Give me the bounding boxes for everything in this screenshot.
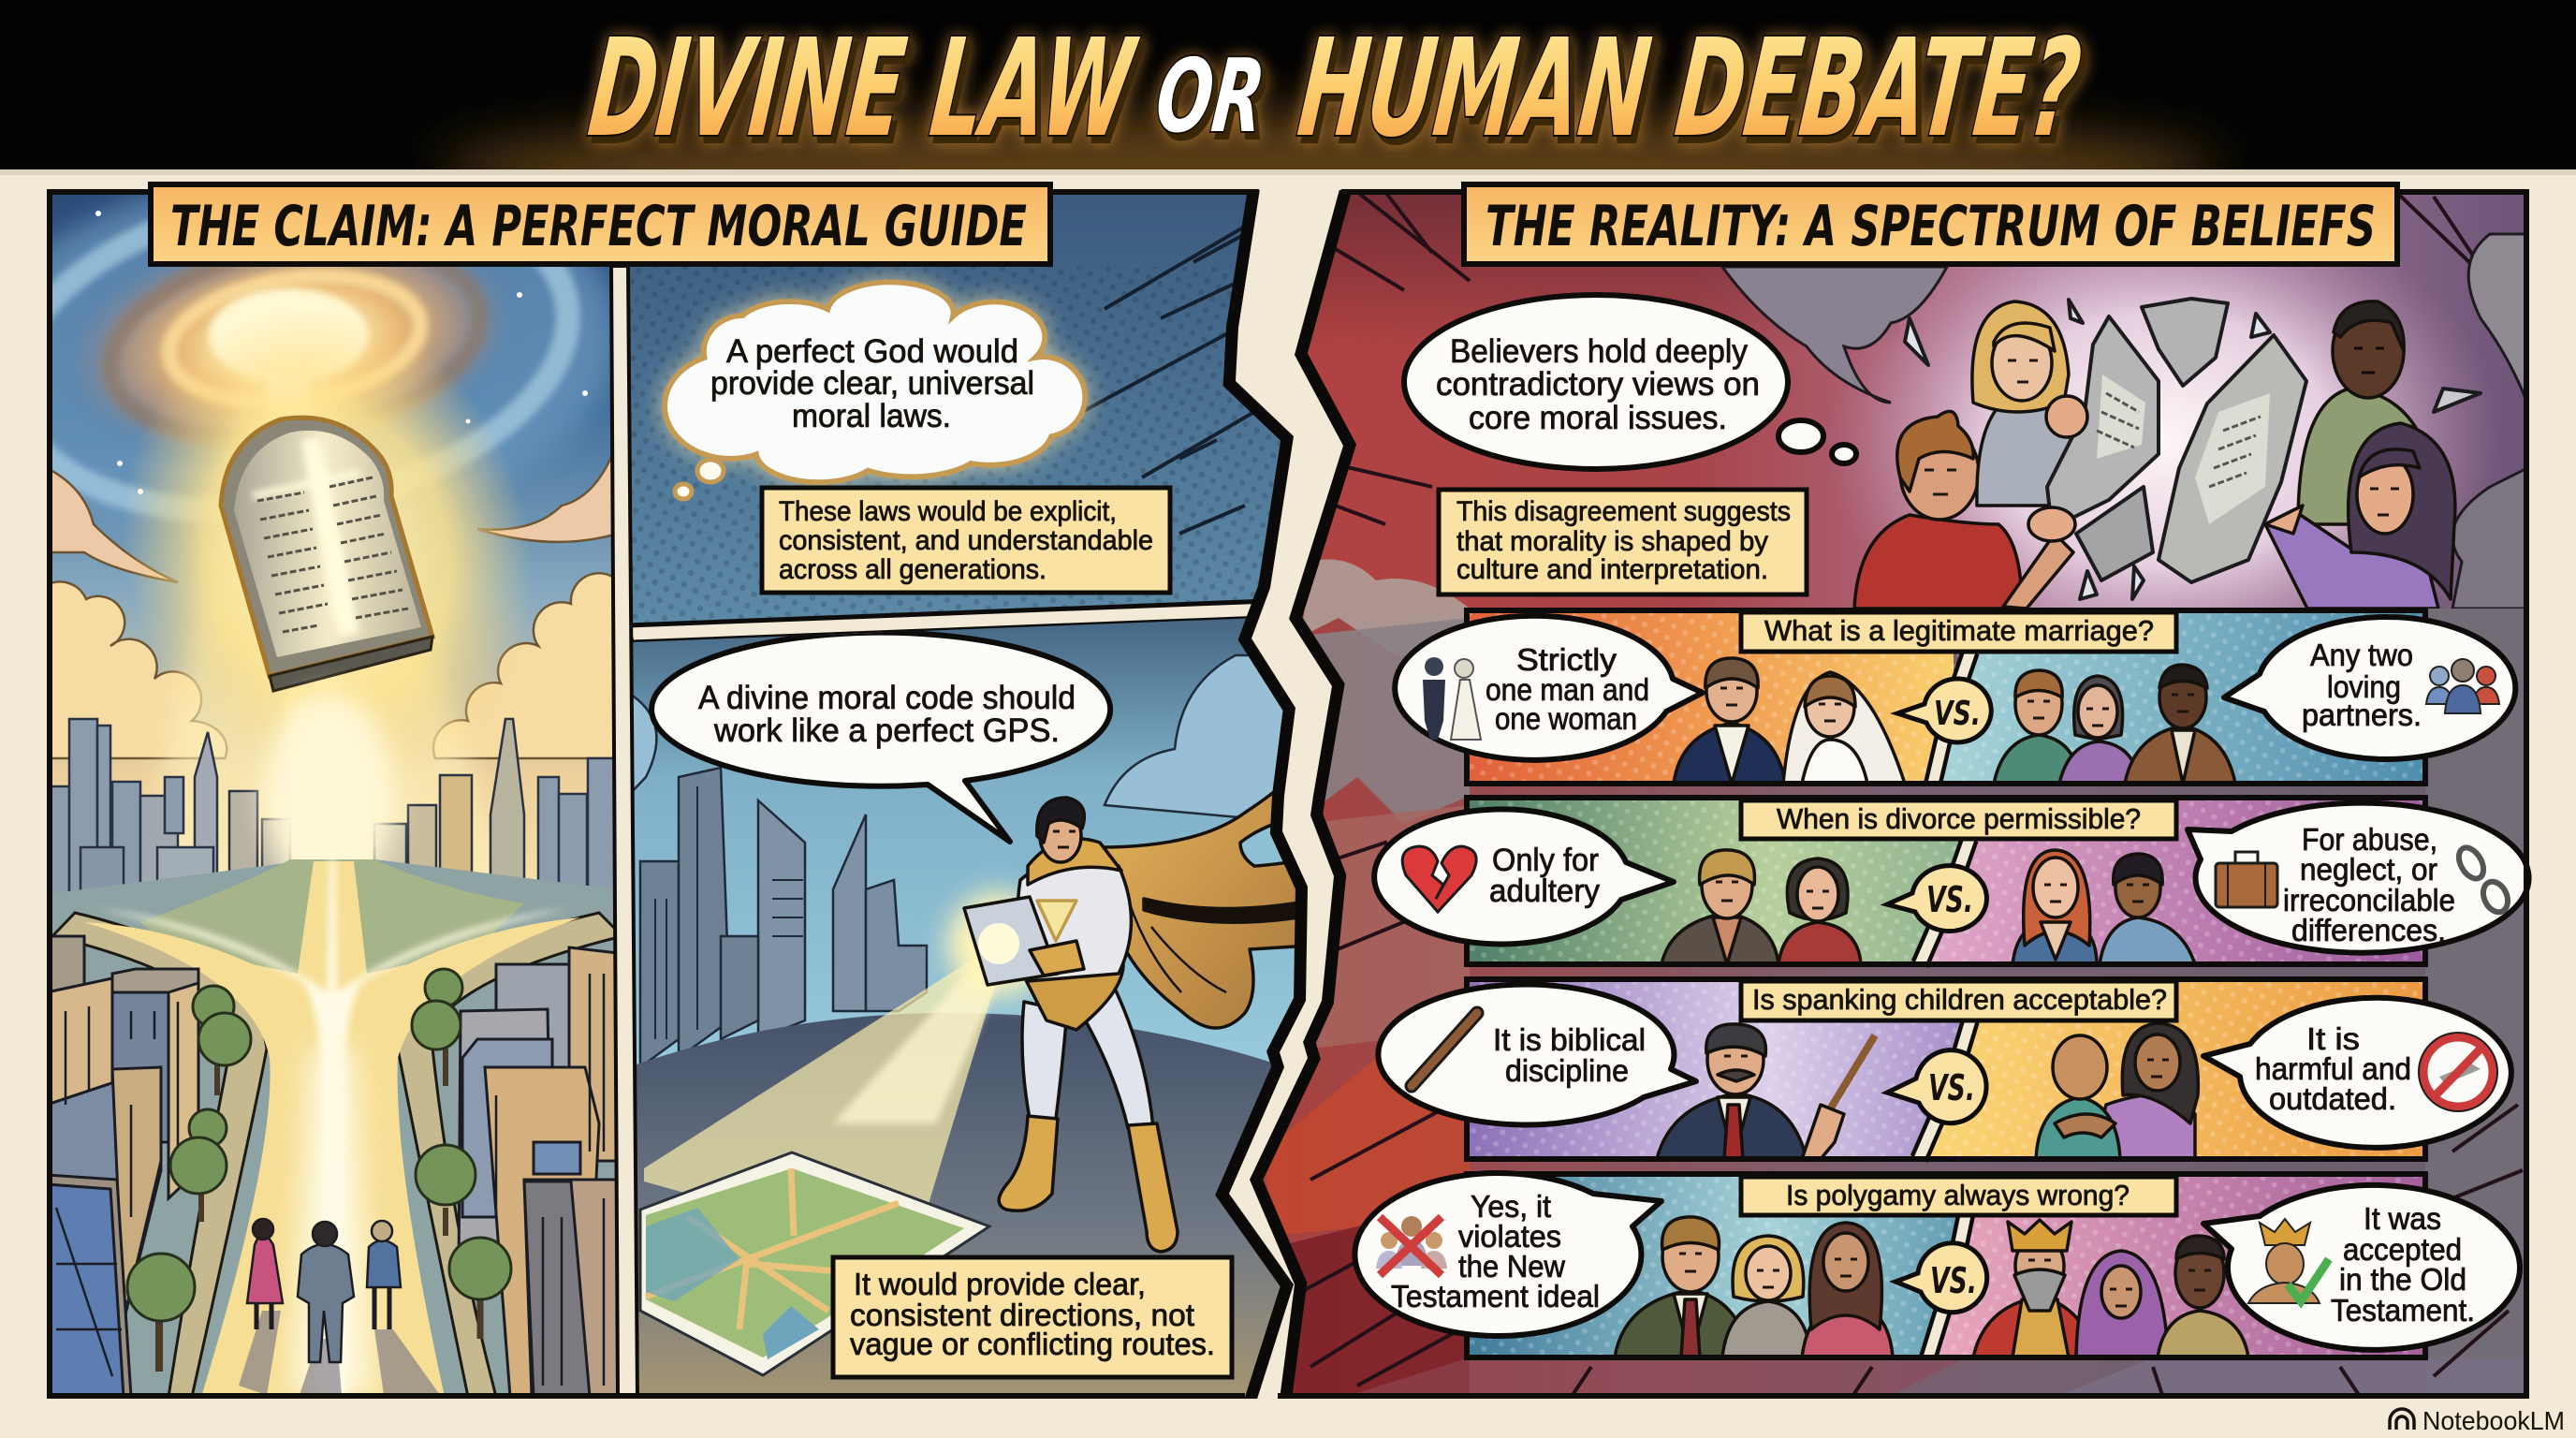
- bubble: one man one woman: [1395, 616, 1703, 760]
- bubble: one man one woman: Strictly: [1516, 642, 1617, 677]
- torso: [1025, 964, 1123, 1030]
- gutter between blue panels: [628, 601, 1269, 642]
- bubble: violates New Testament: Testament ideal: [1391, 1279, 1600, 1313]
- light beam: [644, 892, 1050, 1256]
- row 3: spanking: [1378, 979, 2511, 1159]
- blonde woman: [1972, 301, 2079, 506]
- three couple figures: [1994, 665, 2235, 784]
- caption box: clear directions: [833, 1257, 1232, 1377]
- tan robed man: [2158, 1236, 2248, 1357]
- caption box: explicit laws: consistent, and understandable: [779, 525, 1153, 556]
- bubble: one man one woman: one woman: [1495, 701, 1637, 736]
- bubble: abuse neglect: irreconcilable: [2283, 883, 2455, 917]
- title: DIVINE LAW: [582, 10, 1144, 168]
- thought text: moral laws.: [792, 398, 951, 434]
- man in blue shirt: [2100, 854, 2195, 964]
- bubble: biblical discipline: discipline: [1505, 1053, 1629, 1088]
- bubble: accepted in Old Testament: Testament.: [2331, 1293, 2475, 1328]
- question banner: Is spanking children acceptable?: [1752, 983, 2167, 1016]
- icon: prohibition sign: [2419, 1033, 2497, 1111]
- icon: suitcase: [2216, 852, 2277, 907]
- bubble: contradictory views: contradictory views on: [1436, 366, 1760, 403]
- bubble: harmful outdated: outdated.: [2269, 1081, 2396, 1116]
- bubble: contradictory views: [1404, 295, 1856, 469]
- woman in red: [1778, 858, 1861, 964]
- city skyline: [47, 719, 616, 908]
- bubble: only for adultery: [1374, 809, 1674, 944]
- caption box: clear directions: It would provide clear,: [854, 1267, 1146, 1301]
- hijab woman: [2076, 1251, 2168, 1357]
- bubble: one man one woman: one man and: [1486, 672, 1649, 707]
- caption box: disagreement: [1439, 490, 1807, 594]
- title: OR: [1151, 37, 1270, 155]
- blond man: [1615, 1217, 1749, 1357]
- blonde woman: [1722, 1236, 1811, 1357]
- bubble: biblical discipline: It is biblical: [1493, 1022, 1646, 1057]
- bubble: harmful outdated: harmful and: [2255, 1051, 2411, 1086]
- left buildings: [47, 936, 198, 1397]
- vs badge: [1897, 679, 1991, 742]
- grey rubble clouds: [1722, 234, 2527, 609]
- head: [1040, 810, 1081, 862]
- bubble: violates New Testament: Yes, it: [1471, 1189, 1551, 1224]
- landscape: [47, 859, 637, 1395]
- bride: [1783, 672, 1905, 784]
- illustration: people breaking stone tablets: [1722, 187, 2527, 693]
- broken stone tablets: [1905, 299, 2481, 599]
- caption box: clear directions: consistent directions, not: [850, 1298, 1194, 1332]
- map on ground: [640, 1152, 989, 1375]
- caption box: explicit laws: across all generations.: [779, 554, 1046, 585]
- thought text: [711, 338, 1033, 428]
- vs badge: [1895, 1243, 1987, 1313]
- vs badge: [1887, 1050, 1986, 1123]
- clouds: [47, 440, 618, 758]
- swirling sky: [52, 195, 610, 521]
- bubble: abuse neglect: neglect, or: [2300, 852, 2437, 887]
- superhero: [964, 772, 1310, 1252]
- caption box: disagreement: that morality is shaped by: [1456, 526, 1768, 557]
- bubble: only for adultery: adultery: [1489, 873, 1600, 909]
- left leg: [1022, 1002, 1067, 1119]
- three people on road: [239, 1219, 440, 1395]
- ground: [628, 1013, 1310, 1404]
- title: [582, 10, 2087, 168]
- NotebookLM logo: NotebookLM: [2422, 1406, 2565, 1435]
- speech bubble GPS: [651, 633, 1110, 842]
- thought text: provide clear, universal: [710, 365, 1034, 402]
- speech bubble GPS: work like a perfect GPS.: [713, 712, 1060, 749]
- bubble: violates New Testament: [1354, 1173, 1661, 1336]
- thought cloud: [665, 282, 1085, 499]
- icon: groom and bride: [1423, 657, 1481, 740]
- bubble: abuse neglect: [2188, 803, 2529, 953]
- caption box: clear directions: vague or conflicting routes.: [850, 1327, 1215, 1361]
- caption box: disagreement: culture and interpretation.: [1456, 554, 1768, 585]
- icon: group of people: [2426, 659, 2499, 713]
- dark haired woman: [2265, 423, 2455, 609]
- question banner: When is divorce permissible?: [1777, 802, 2141, 835]
- mother and child: [2036, 1023, 2198, 1159]
- king: [1973, 1220, 2097, 1357]
- clouds: [628, 655, 1310, 824]
- bubble: harmful outdated: [2203, 998, 2511, 1148]
- bubble: accepted in Old Testament: [2203, 1185, 2520, 1350]
- tablet device: [964, 897, 1058, 985]
- vs badge: [1887, 866, 1986, 932]
- header band: [0, 0, 2576, 175]
- question banner: What is a legitimate marriage?: [1764, 614, 2154, 647]
- row 4: polygamy: [1354, 1173, 2520, 1357]
- bubble: harmful outdated: It is: [2306, 1021, 2360, 1056]
- caption box: explicit laws: [762, 488, 1170, 593]
- bubble: contradictory views: Believers hold deeply: [1450, 333, 1748, 370]
- caption box: disagreement: This disagreement suggests: [1456, 496, 1791, 527]
- bubble: any two loving partners: [2224, 617, 2515, 759]
- glowing forked road: [52, 859, 622, 1397]
- vs badge: VS.: [1926, 879, 1973, 920]
- man with moustache: [1661, 850, 1778, 964]
- red haired woman: [2012, 850, 2097, 964]
- icon: broken chain: [2453, 844, 2512, 916]
- lightning crack divider: [1229, 183, 1343, 1414]
- question banner: Is polygamy always wrong?: [1786, 1179, 2130, 1211]
- panel: thought bubble on blue: [628, 192, 1311, 632]
- panel: superhero with GPS: [628, 609, 1311, 1404]
- question banner: [1741, 1177, 2176, 1215]
- vs badge: VS.: [1934, 695, 1981, 733]
- central light beam: [148, 378, 489, 873]
- trees: [127, 969, 511, 1372]
- caption box: explicit laws: These laws would be explicit,: [779, 496, 1117, 527]
- title: HUMAN DEBATE?: [1292, 10, 2087, 168]
- bubble: accepted in Old Testament: in the Old: [2339, 1262, 2466, 1297]
- brunette woman: [1802, 1223, 1893, 1357]
- bubble: accepted in Old Testament: accepted: [2343, 1232, 2462, 1267]
- bubble: contradictory views: core moral issues.: [1469, 400, 1727, 436]
- thought text: A perfect God would: [726, 333, 1018, 370]
- cape: [1100, 772, 1310, 1028]
- bubble: violates New Testament: the New: [1458, 1249, 1565, 1284]
- panel: the reality background: [1245, 192, 2528, 1404]
- bubble: only for adultery: Only for: [1492, 843, 1599, 878]
- bubble: abuse neglect: For abuse,: [2302, 822, 2437, 857]
- row 1: legitimate marriage: [1395, 610, 2515, 784]
- groom: [1674, 658, 1785, 784]
- icon: broken heart: [1402, 846, 1476, 912]
- hands on tablet: [2028, 396, 2087, 541]
- bubble: abuse neglect: differences.: [2291, 913, 2446, 947]
- bubble: accepted in Old Testament: It was: [2364, 1201, 2441, 1236]
- red shirt man: [1854, 411, 2073, 609]
- speech bubble GPS: A divine moral code should: [698, 680, 1076, 716]
- vs badge: VS.: [1930, 1260, 1977, 1301]
- bubble: any two loving partners: Any two: [2310, 638, 2413, 672]
- background city: [640, 768, 927, 1067]
- icon: stick: [1412, 1013, 1477, 1086]
- icon: king with check: [2248, 1219, 2329, 1303]
- banner: the reality: [1464, 184, 2397, 264]
- vs badge: VS.: [1928, 1067, 1975, 1108]
- banner: the claim: THE CLAIM: A PERFECT MORAL GUIDE: [170, 194, 1027, 259]
- bubble: biblical discipline: [1378, 984, 1696, 1124]
- icon: crossed out family: [1376, 1216, 1447, 1275]
- bubble: any two loving partners: loving: [2327, 669, 2401, 704]
- panel: glowing tablet above forking road: [52, 195, 616, 1393]
- right leg: [1075, 990, 1153, 1128]
- row 2: divorce: [1374, 798, 2529, 964]
- banner: the claim: [151, 184, 1050, 264]
- right buildings: [459, 947, 618, 1397]
- stone tablet: [129, 318, 526, 764]
- stern man with pointer: [1657, 1024, 1875, 1159]
- bubble: violates New Testament: violates: [1458, 1219, 1561, 1254]
- sage green man: [2298, 301, 2426, 524]
- gutter between left panels: [611, 266, 637, 1396]
- bubble: any two loving partners: partners.: [2302, 697, 2422, 732]
